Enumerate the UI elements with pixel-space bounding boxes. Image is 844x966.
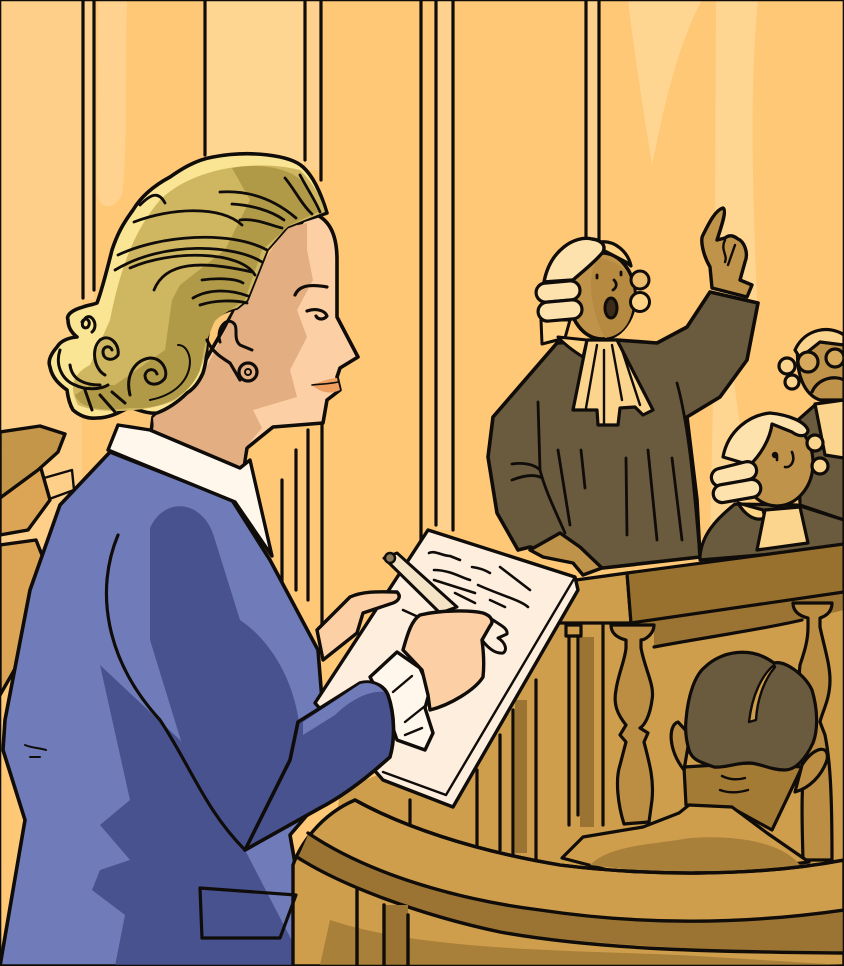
- cuff: [370, 652, 433, 750]
- head: [569, 253, 635, 339]
- wig: [600, 242, 631, 266]
- cuff folds: [393, 676, 425, 735]
- figure: barrister with raised arm: [488, 208, 758, 575]
- furniture: curved front rail: [293, 800, 844, 966]
- jacket upper shading: [150, 506, 320, 850]
- figure: woman taking notes: [25, 154, 578, 938]
- robe: [488, 292, 758, 568]
- jacket seams and pocket: [106, 535, 296, 938]
- pen tip: [482, 620, 507, 653]
- sleeve highlight: [303, 683, 384, 735]
- balusters: [611, 625, 654, 824]
- neck and face: [150, 212, 358, 490]
- hair curls: [58, 317, 166, 412]
- ear and earring: [207, 340, 240, 380]
- figure: judge far right: [779, 330, 844, 520]
- pen: [384, 553, 457, 613]
- resting hand on rail: [530, 533, 602, 575]
- notepad: [315, 530, 578, 807]
- left hand: [317, 592, 399, 660]
- hair: [49, 154, 327, 418]
- sleeve forearm: [245, 682, 394, 850]
- figure: seated judge: [700, 413, 844, 560]
- figure: woman jacket underlay: [0, 452, 322, 966]
- figure: man seen from behind: [562, 652, 827, 878]
- furniture: wooden dock and balusters: [330, 544, 844, 880]
- collar: [108, 425, 272, 556]
- figure: officer at left: [0, 426, 74, 695]
- raised hand: [702, 208, 752, 297]
- right hand: [403, 611, 492, 710]
- jabot: [558, 337, 587, 357]
- jacket crease: [25, 745, 46, 757]
